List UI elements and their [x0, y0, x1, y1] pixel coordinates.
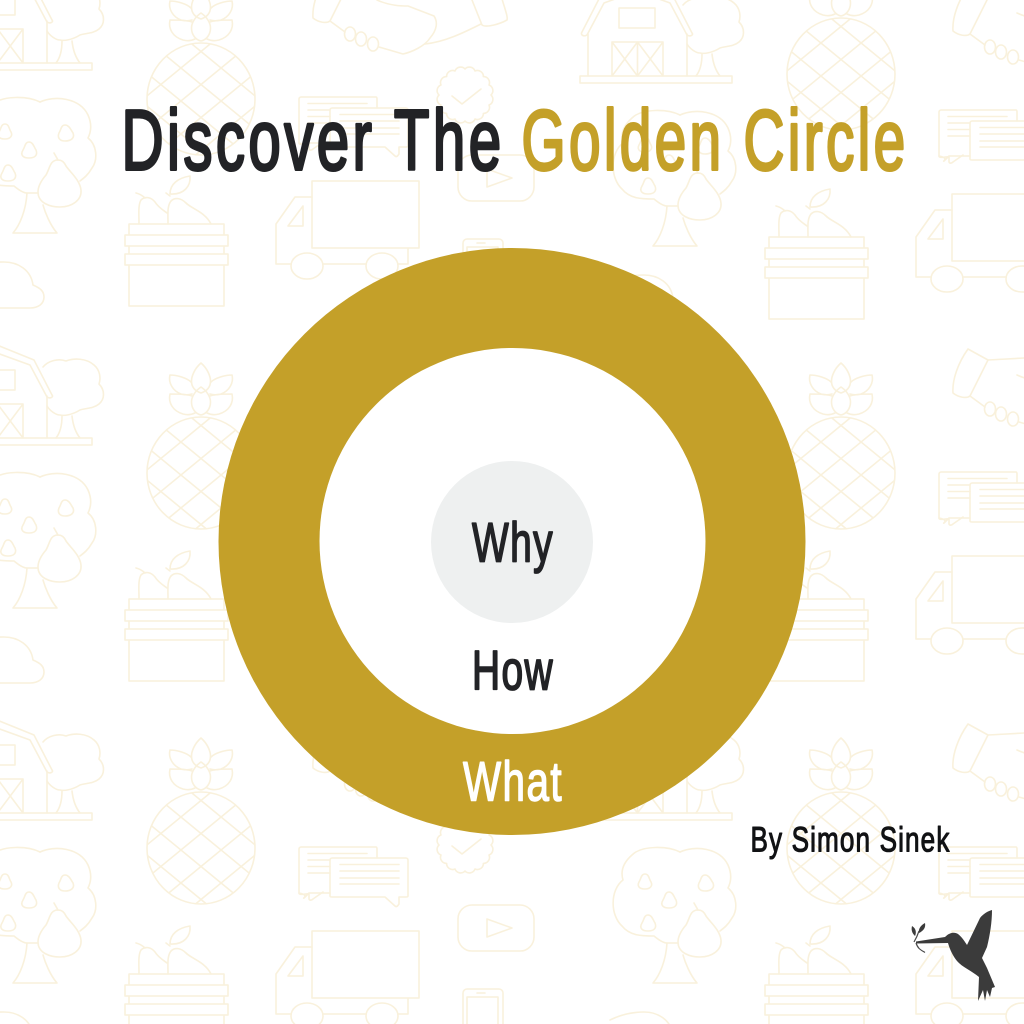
- outer ring: What: [218, 248, 806, 835]
- golden circle diagram: [218, 248, 806, 835]
- label: What: What: [463, 750, 563, 812]
- attribution: By Simon Sinek: By Simon Sinek: [750, 820, 950, 860]
- title: Discover The: Discover The: [122, 94, 504, 188]
- label: Why: Why: [472, 510, 554, 574]
- middle circle: How: [320, 348, 706, 734]
- inner circle: Why: [431, 461, 593, 623]
- icon: hummingbird logo with twig: [912, 910, 995, 1001]
- label: How: How: [472, 638, 554, 702]
- title: [122, 94, 908, 188]
